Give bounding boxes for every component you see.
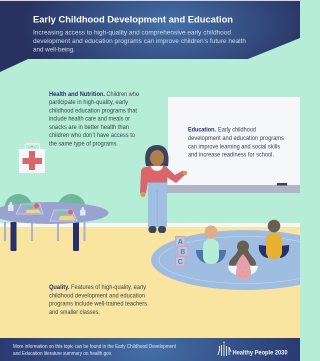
table top	[0, 202, 108, 224]
text: quality	[49, 284, 147, 316]
table with chairs	[0, 194, 108, 251]
footer note: and Education literature summary on health.gov.	[13, 351, 112, 357]
text: education: Education.	[188, 126, 216, 134]
text: education: development and education programs	[188, 135, 284, 142]
text: quality: programs include well-trained teachers	[49, 300, 147, 308]
floor	[0, 223, 300, 338]
text: health and nutrition: include health care and meals or	[49, 116, 130, 123]
text: health and nutrition: Health and Nutrition.	[49, 91, 105, 98]
text: health and nutrition: snacks are in better health than	[49, 124, 129, 131]
logo: healthy people 2030: Healthy People 2030	[232, 350, 288, 356]
text: health and nutrition: the same type of programs.	[49, 140, 118, 148]
text: health and nutrition: Children who	[106, 91, 140, 98]
text: education: Early childhood	[218, 126, 256, 134]
child in green shirt	[196, 226, 226, 264]
text: quality: Features of high-quality, early	[71, 284, 147, 291]
chairs	[4, 194, 86, 222]
panel: footer	[0, 338, 300, 361]
food tray left	[16, 203, 43, 214]
footer note: More information on this topic can be found in the Early Childhood Development	[13, 344, 176, 350]
icon: first aid kit	[19, 144, 45, 173]
header description: and well-being.	[33, 46, 75, 54]
text: quality: childhood development and education	[49, 292, 145, 299]
whiteboard	[166, 97, 300, 193]
table legs	[4, 222, 86, 251]
food tray right	[50, 210, 77, 221]
header description	[33, 30, 246, 54]
header description: Increasing access to high-quality and comprehensive early childhood	[33, 30, 231, 36]
header description: development and education programs can improve children’s future health	[33, 38, 246, 45]
block C: C	[178, 259, 183, 266]
text: education	[188, 126, 284, 159]
title: Early Childhood Development and Education	[33, 14, 233, 24]
block A: A	[178, 239, 183, 246]
collar	[151, 166, 163, 171]
child in yellow shirt	[259, 220, 289, 259]
text: quality: and smaller classes.	[49, 309, 100, 316]
rug	[151, 230, 320, 290]
text: health and nutrition: children who don’t have access to	[49, 132, 136, 139]
letter blocks	[176, 236, 188, 266]
text: health and nutrition: childhood education programs that	[49, 108, 137, 114]
body	[146, 166, 167, 182]
teacher	[140, 145, 187, 233]
block B: B	[180, 249, 185, 256]
hair	[145, 145, 169, 166]
legs	[148, 182, 167, 233]
text: education: can improve learning and social skills	[188, 143, 280, 150]
text: health and nutrition: participate in high-quality, early	[49, 99, 129, 106]
footer note	[13, 344, 176, 357]
child in pink shirt	[228, 240, 258, 280]
text: education: and increase readiness for school.	[188, 152, 274, 159]
milk cartons	[8, 202, 86, 216]
panel: header	[0, 1, 300, 72]
right arm pointing	[165, 166, 186, 183]
face	[150, 150, 164, 166]
text: health and nutrition	[49, 91, 140, 148]
left arm	[140, 167, 149, 193]
text: quality: Quality.	[49, 284, 70, 291]
logo: healthy people 2030	[218, 342, 288, 356]
